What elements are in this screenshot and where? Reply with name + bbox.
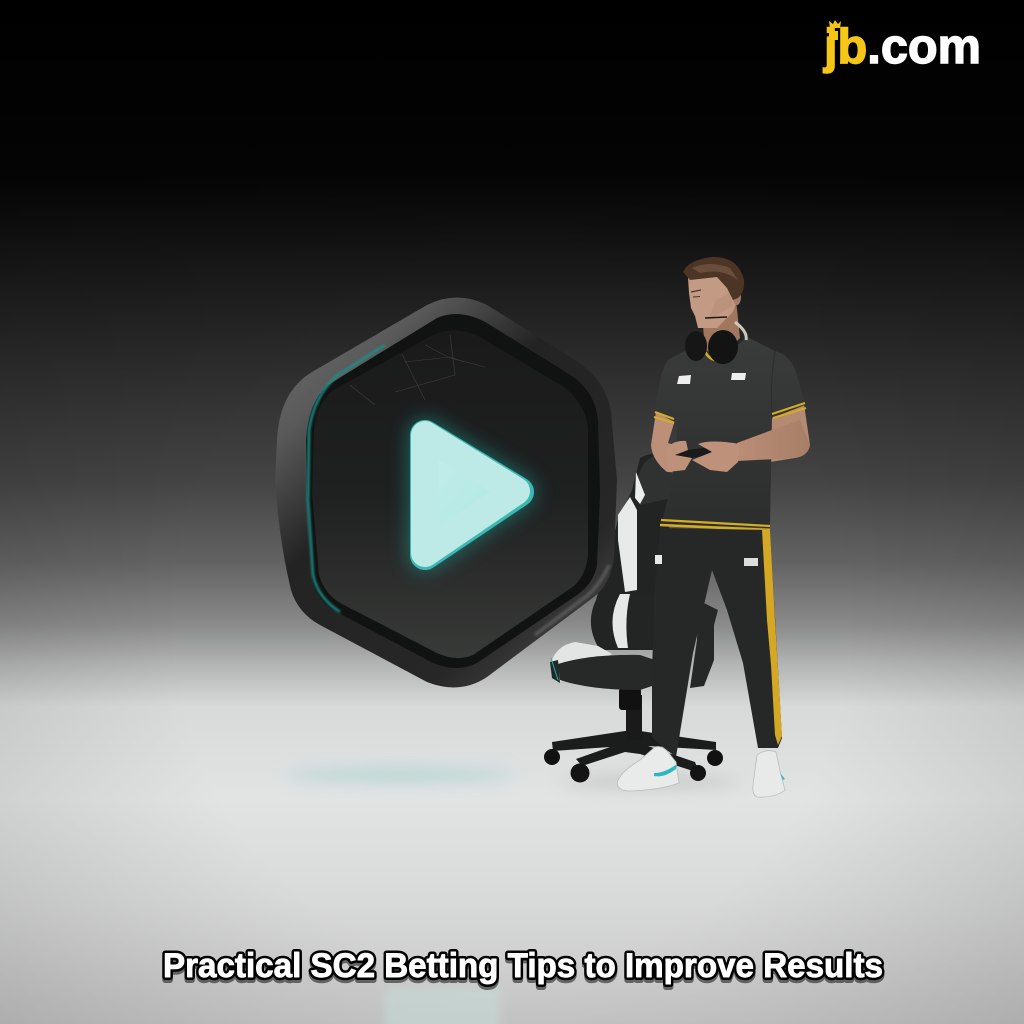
badge outer rim [275, 298, 617, 687]
chair head pillow [638, 454, 672, 505]
hair [683, 257, 744, 300]
headset [685, 317, 746, 364]
player figure [617, 257, 810, 797]
badge face [312, 330, 588, 658]
shirt badge left [677, 375, 691, 384]
chair armrest [690, 600, 718, 688]
logo wordmark: jb.com [823, 20, 981, 74]
trouser badge left [655, 555, 662, 564]
eye and brow [691, 290, 701, 292]
hands [666, 441, 740, 472]
chair head pillow sliver [635, 472, 645, 504]
title caption: Practical SC2 Betting Tips to Improve Results [163, 950, 883, 988]
right forearm [737, 420, 810, 461]
left sneaker [617, 747, 679, 791]
badge rim highlight [535, 565, 609, 635]
hexagon play badge [275, 298, 617, 687]
yellow trouser stripe [762, 530, 782, 745]
chair seat [550, 642, 655, 690]
chair white panel [618, 497, 637, 592]
gaming chair [544, 453, 723, 782]
shirt badge right [731, 373, 746, 380]
t-shirt [654, 337, 806, 530]
play icon [425, 435, 516, 553]
play icon edge [425, 435, 519, 555]
trousers [652, 528, 782, 757]
badge inner ring [306, 314, 600, 668]
brand logo [822, 20, 981, 74]
trouser badge right [744, 558, 758, 566]
floor shadow [285, 769, 740, 788]
badge teal edge glow [308, 345, 385, 612]
right upper arm [770, 404, 810, 462]
badge scratches [350, 335, 485, 405]
neck and face [688, 268, 741, 360]
right sneaker [753, 751, 785, 797]
play icon glow [425, 435, 519, 555]
game controller [672, 447, 712, 458]
title caption: Practical SC2 Betting Tips to Improve Results [163, 947, 883, 985]
sleeve and hem stripes [654, 403, 806, 530]
logo j stem [829, 31, 838, 40]
chair base [544, 688, 723, 782]
chair lumbar pillow [612, 593, 655, 648]
chair back [591, 453, 672, 650]
logo crown [829, 20, 841, 28]
title caption: Practical SC2 Betting Tips to Improve Results [163, 947, 883, 985]
yellow collar [705, 352, 716, 360]
left arm [651, 412, 690, 473]
